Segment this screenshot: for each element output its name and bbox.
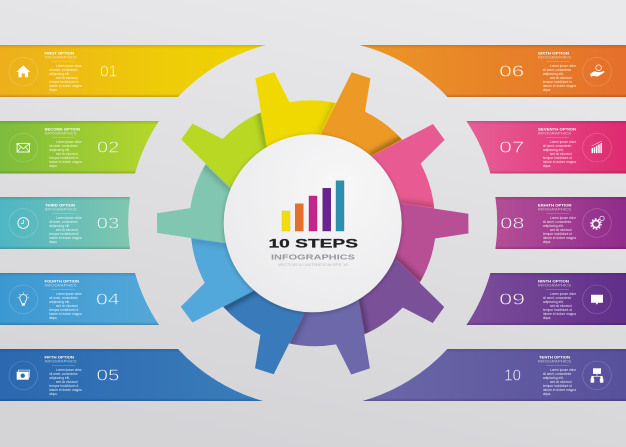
body text: tempor incididunt ut	[49, 383, 79, 388]
body text: sed do eiusmod	[56, 151, 78, 156]
body text: tempor incididunt ut	[543, 307, 573, 312]
heading: SIXTH OPTION	[538, 50, 569, 56]
heading: INFOGRAPHICS	[538, 132, 572, 136]
body text: tempor incididunt ut	[543, 231, 573, 236]
body text: sed do eiusmod	[56, 303, 78, 308]
body text	[49, 63, 82, 92]
body text: Lorem ipsum dolor	[56, 215, 82, 220]
panel: fourth option	[0, 273, 159, 325]
heading: INFOGRAPHICS	[44, 360, 77, 364]
ribbon	[0, 45, 266, 97]
body text: aliqua.	[543, 87, 551, 92]
body text: aliqua.	[543, 239, 551, 244]
gear segment: teal	[157, 164, 231, 244]
body text: adipiscing elit,	[543, 223, 564, 228]
number: 08	[500, 216, 524, 233]
body text: tempor incididunt ut	[49, 155, 79, 160]
heading: FIRST OPTION	[44, 50, 74, 56]
body text: sed do eiusmod	[56, 227, 78, 232]
number: 09	[499, 292, 525, 309]
ribbon	[0, 197, 130, 249]
ribbon	[495, 197, 626, 249]
panel: sixth option	[359, 45, 626, 97]
panel: eighth option	[495, 197, 626, 249]
body text: aliqua.	[543, 391, 551, 396]
heading	[538, 354, 572, 366]
body text: aliqua.	[543, 315, 551, 320]
number: 06	[499, 64, 524, 81]
body text: labore et dolore magna	[543, 311, 577, 316]
body text: labore et dolore magna	[49, 83, 82, 88]
body text: Lorem ipsum dolor	[550, 215, 577, 220]
body text: sit amet, consectetur	[543, 143, 572, 148]
panel: fifth option	[0, 349, 263, 401]
icon: home	[9, 57, 38, 86]
heading	[538, 126, 576, 138]
body text: sed do eiusmod	[550, 227, 572, 232]
body text: Lorem ipsum dolor	[550, 63, 577, 68]
body text	[49, 215, 82, 244]
body text: Lorem ipsum dolor	[56, 367, 82, 372]
heading	[44, 50, 77, 62]
body text: adipiscing elit,	[49, 375, 70, 380]
number: 02	[97, 140, 119, 157]
gear segment: yellow	[256, 72, 336, 147]
body text: Lorem ipsum dolor	[550, 291, 577, 296]
body text: tempor incididunt ut	[49, 79, 79, 84]
body text: aliqua.	[49, 163, 57, 168]
body text: Lorem ipsum dolor	[550, 367, 577, 372]
center disc	[224, 134, 402, 312]
body text: aliqua.	[49, 315, 57, 320]
ribbon	[0, 273, 159, 325]
caption: VECTOR ILLUSTRATION EPS 10	[278, 263, 348, 267]
heading: SEVENTH OPTION	[538, 126, 576, 132]
icon: speech bubble	[583, 285, 611, 314]
heading: INFOGRAPHICS	[44, 56, 77, 60]
body text: sit amet, consectetur	[49, 371, 78, 376]
gear segment: pink	[371, 124, 444, 209]
body text: sed do eiusmod	[550, 379, 572, 384]
gear segment: purple	[358, 258, 444, 334]
gear wheel	[157, 72, 468, 374]
heading: FOURTH OPTION	[44, 278, 79, 284]
ribbon	[359, 45, 626, 97]
body text: labore et dolore magna	[49, 235, 82, 240]
heading: FIFTH OPTION	[44, 354, 74, 360]
body text	[49, 367, 82, 396]
body text: labore et dolore magna	[543, 235, 577, 240]
body text: adipiscing elit,	[49, 147, 70, 152]
ribbon	[466, 121, 626, 174]
icon: banknotes	[9, 361, 38, 390]
ribbon	[0, 121, 159, 174]
body text	[49, 139, 82, 168]
icon: clock	[9, 209, 38, 237]
heading	[44, 354, 77, 366]
body text: labore et dolore magna	[49, 387, 82, 392]
ribbon	[362, 349, 626, 401]
body text: sit amet, consectetur	[543, 219, 572, 224]
number: 10	[504, 368, 521, 385]
body text: labore et dolore magna	[543, 159, 577, 164]
gear segment: magenta	[394, 204, 468, 283]
number: 03	[97, 216, 119, 233]
body text: sit amet, consectetur	[49, 143, 78, 148]
icon: rising bar chart	[583, 133, 611, 162]
body text	[543, 215, 577, 244]
body text	[49, 291, 82, 320]
gear segment: violet	[289, 300, 370, 374]
body text: adipiscing elit,	[49, 223, 70, 228]
gear segment: blue	[223, 290, 305, 374]
body text: labore et dolore magna	[49, 159, 82, 164]
body text: sit amet, consectetur	[543, 295, 572, 300]
heading	[44, 278, 79, 290]
body text	[543, 367, 577, 396]
ribbon	[0, 349, 263, 401]
body text: aliqua.	[49, 391, 57, 396]
body text	[543, 139, 577, 168]
icon: light bulb	[9, 285, 38, 314]
heading: NINTH OPTION	[538, 278, 569, 284]
body text: aliqua.	[49, 239, 57, 244]
heading: TENTH OPTION	[539, 354, 570, 360]
panel: third option	[0, 197, 130, 249]
body text: tempor incididunt ut	[543, 155, 573, 160]
body text: labore et dolore magna	[543, 83, 577, 88]
number: 05	[96, 368, 120, 385]
body text: tempor incididunt ut	[49, 307, 79, 312]
subtitle: INFOGRAPHICS	[271, 252, 355, 261]
panel: second option	[0, 121, 159, 174]
bar chart logo	[282, 181, 344, 231]
body text: tempor incididunt ut	[543, 79, 573, 84]
panel: tenth option	[362, 349, 626, 401]
body text: sit amet, consectetur	[543, 371, 572, 376]
body text: sit amet, consectetur	[543, 67, 572, 72]
heading	[44, 202, 77, 214]
heading: THIRD OPTION	[45, 202, 75, 208]
body text: labore et dolore magna	[49, 311, 82, 316]
body text	[543, 291, 577, 320]
number: 07	[499, 140, 524, 157]
number: 04	[96, 292, 120, 309]
body text: adipiscing elit,	[543, 147, 564, 152]
body text: sit amet, consectetur	[49, 219, 78, 224]
gear segment: orange	[320, 72, 402, 156]
icon: hand with coin	[583, 57, 611, 86]
body text: adipiscing elit,	[49, 71, 70, 76]
heading	[538, 202, 572, 214]
body text: labore et dolore magna	[543, 387, 577, 392]
body text: sit amet, consectetur	[49, 295, 78, 300]
heading	[538, 278, 572, 290]
panel: first option	[0, 45, 266, 97]
body text	[543, 63, 577, 92]
panel: seventh option	[466, 121, 626, 174]
panel: ninth option	[466, 273, 626, 325]
icon: gears	[583, 209, 611, 237]
number: 01	[100, 64, 117, 81]
body text: sed do eiusmod	[550, 303, 572, 308]
heading: INFOGRAPHICS	[538, 284, 572, 288]
body text: Lorem ipsum dolor	[56, 291, 82, 296]
body text: sed do eiusmod	[550, 151, 572, 156]
heading: INFOGRAPHICS	[538, 56, 572, 60]
heading: INFOGRAPHICS	[538, 208, 572, 212]
heading: INFOGRAPHICS	[44, 208, 77, 212]
heading	[44, 126, 80, 138]
heading: INFOGRAPHICS	[44, 284, 77, 288]
body text: adipiscing elit,	[543, 375, 564, 380]
body text: Lorem ipsum dolor	[56, 139, 82, 144]
gear segment: light blue	[180, 238, 254, 322]
gear segment: green	[181, 112, 267, 188]
ribbon	[466, 273, 626, 325]
body text: adipiscing elit,	[49, 299, 70, 304]
body text: sed do eiusmod	[56, 379, 78, 384]
body text: Lorem ipsum dolor	[56, 63, 82, 68]
heading: EIGHTH OPTION	[538, 202, 572, 208]
body text: adipiscing elit,	[543, 299, 564, 304]
body text: Lorem ipsum dolor	[550, 139, 577, 144]
icon: people with chat	[583, 361, 611, 390]
body text: adipiscing elit,	[543, 71, 564, 76]
body text: tempor incididunt ut	[543, 383, 573, 388]
heading: SECOND OPTION	[44, 126, 80, 132]
body text: sed do eiusmod	[550, 75, 572, 80]
heading	[538, 50, 572, 62]
body text: aliqua.	[49, 87, 57, 92]
body text: sit amet, consectetur	[49, 67, 78, 72]
heading: INFOGRAPHICS	[44, 132, 77, 136]
body text: tempor incididunt ut	[49, 231, 79, 236]
icon: envelope	[9, 133, 38, 162]
body text: aliqua.	[543, 163, 551, 168]
heading: INFOGRAPHICS	[538, 360, 572, 364]
title: 10 STEPS	[268, 238, 358, 251]
body text: sed do eiusmod	[56, 75, 78, 80]
